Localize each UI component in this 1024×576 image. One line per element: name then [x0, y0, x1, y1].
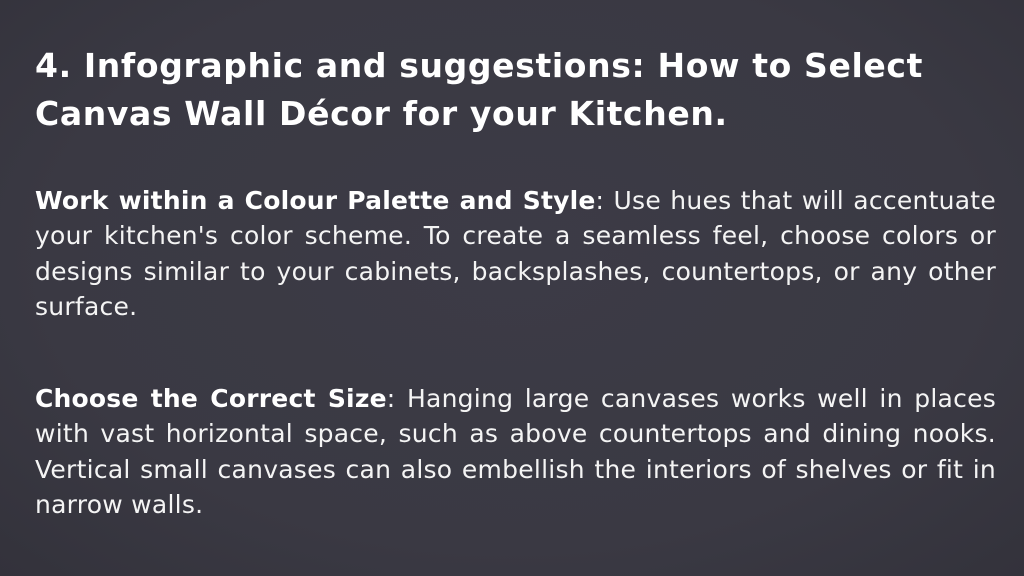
title: 4. Infographic and suggestions: How to Select	[35, 46, 923, 85]
text block: colour palette and style: designs similar to your cabinets, backsplashes, countertops, or any other	[35, 257, 996, 286]
text block: choose the correct size	[35, 384, 996, 519]
text block: choose the correct size: Vertical small canvases can also embellish the interiors of shelves or fit in	[35, 455, 996, 484]
text block: choose the correct size: with vast horizontal space, such as above countertops and dining nooks.	[35, 419, 996, 448]
title	[35, 46, 923, 133]
text block: colour palette and style: Work within a Colour Palette and Style: Use hues that will accentuate	[35, 186, 996, 215]
text block: choose the correct size: narrow walls.	[35, 490, 203, 519]
text block: colour palette and style	[35, 186, 996, 321]
text block: colour palette and style: surface.	[35, 292, 137, 321]
text block: choose the correct size: Choose the Correct Size: Hanging large canvases works well in places	[35, 384, 996, 413]
text block: colour palette and style: your kitchen's color scheme. To create a seamless feel, choose colors or	[35, 221, 996, 250]
title: Canvas Wall Décor for your Kitchen.	[35, 94, 728, 133]
